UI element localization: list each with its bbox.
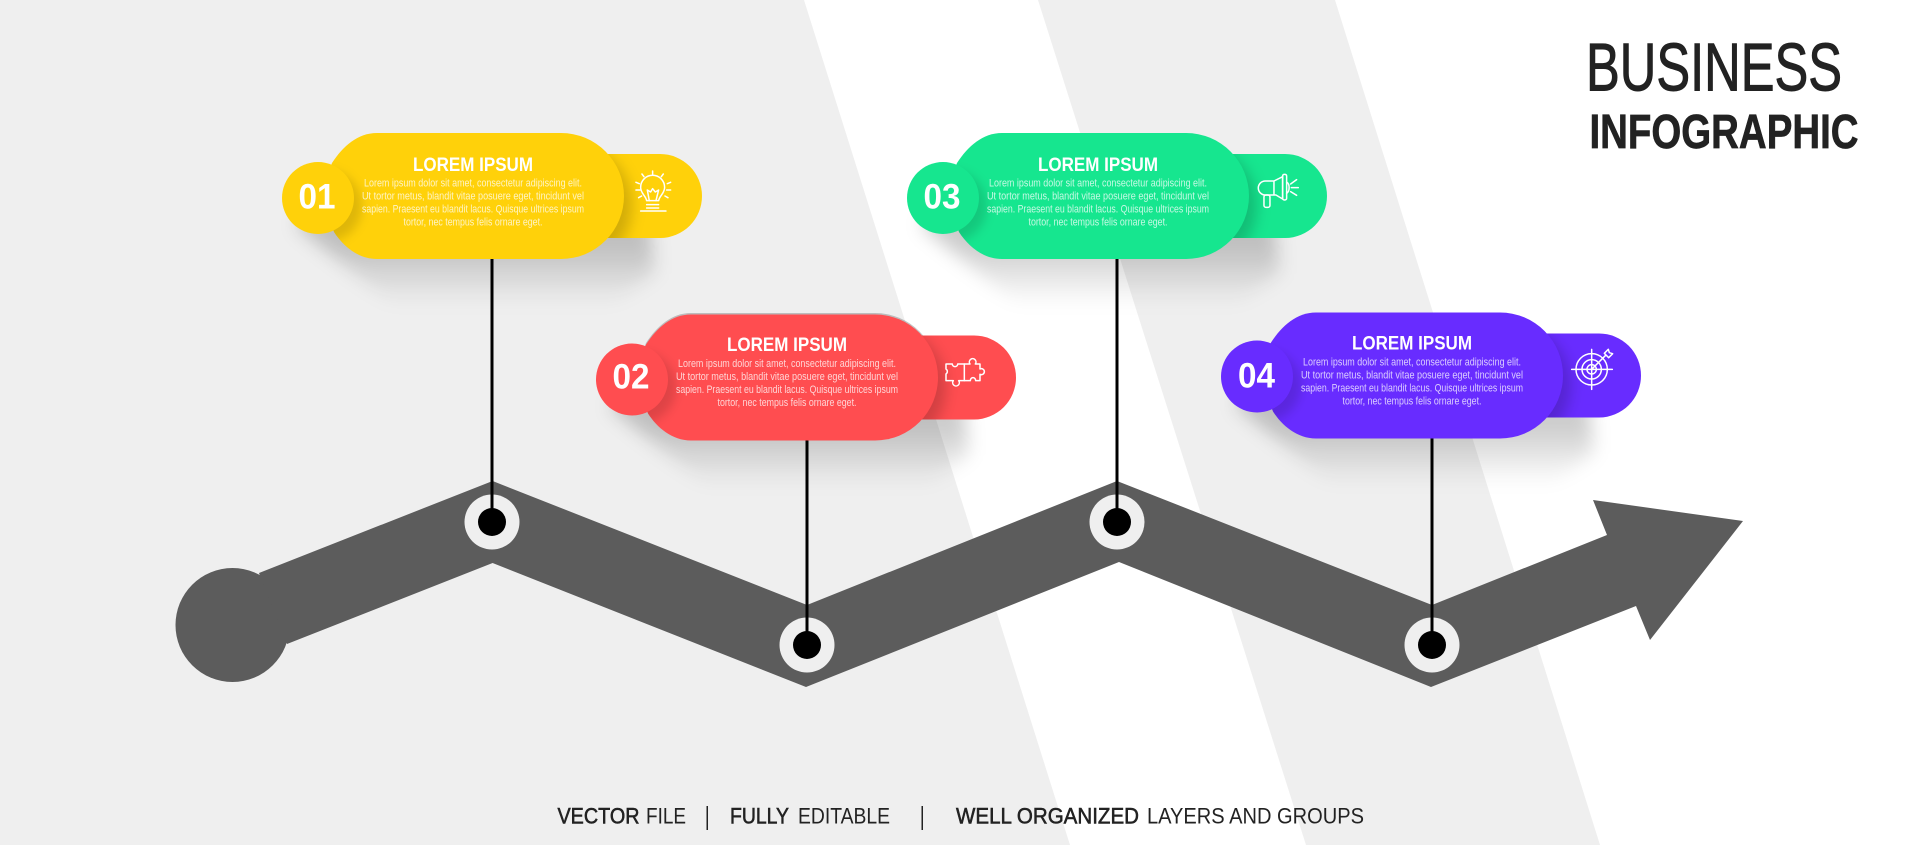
body text: sapien. Praesent eu blandit lacus. Quisque ultrices ipsum [676, 384, 898, 396]
heading: LOREM IPSUM [1038, 155, 1158, 176]
body text: tortor, nec tempus felis ornare eget. [404, 216, 542, 228]
body text [987, 178, 1209, 228]
title: INFOGRAPHIC [1590, 105, 1858, 159]
footer tagline: FILE [646, 804, 686, 828]
body text: Lorem ipsum dolor sit amet, consectetur adipiscing elit. [364, 178, 582, 190]
number 02: 02 [612, 358, 650, 396]
heading: LOREM IPSUM [413, 155, 533, 176]
body text: Ut tortor metus, blandit vitae posuere eget, tincidunt vel [1301, 370, 1523, 382]
body text [676, 358, 898, 409]
body text: Ut tortor metus, blandit vitae posuere eget, tincidunt vel [362, 190, 584, 202]
body text: sapien. Praesent eu blandit lacus. Quisque ultrices ipsum [362, 204, 584, 216]
card 01 yellow [282, 133, 702, 306]
footer tagline: VECTOR [558, 804, 640, 828]
body text: Ut tortor metus, blandit vitae posuere eget, tincidunt vel [676, 371, 898, 383]
timeline node 3 [1090, 255, 1144, 550]
body text: Lorem ipsum dolor sit amet, consectetur adipiscing elit. [1303, 356, 1521, 368]
icon: light bulb [636, 171, 671, 211]
body text: sapien. Praesent eu blandit lacus. Quisque ultrices ipsum [1301, 382, 1523, 394]
body text: Lorem ipsum dolor sit amet, consectetur adipiscing elit. [989, 178, 1207, 190]
zigzag timeline arrow [176, 481, 1743, 687]
body text: Lorem ipsum dolor sit amet, consectetur adipiscing elit. [678, 358, 896, 370]
card 04 purple [1221, 312, 1641, 486]
card 02 red [596, 313, 1016, 488]
timeline node 4 [1404, 435, 1460, 672]
card 03 green [907, 133, 1327, 306]
body text: sapien. Praesent eu blandit lacus. Quisque ultrices ipsum [987, 204, 1209, 216]
body text: tortor, nec tempus felis ornare eget. [1028, 216, 1168, 228]
body text [362, 178, 584, 228]
footer tagline: EDITABLE [798, 804, 890, 828]
body text: tortor, nec tempus felis ornare eget. [1342, 396, 1482, 408]
body text [1301, 356, 1523, 408]
timeline node 1 [464, 255, 520, 550]
number 04: 04 [1238, 356, 1276, 396]
title [1586, 30, 1858, 159]
title: BUSINESS [1586, 30, 1842, 106]
footer tagline: LAYERS AND GROUPS [1147, 804, 1364, 828]
icon: target with arrow [1572, 349, 1613, 389]
footer tagline: FULLY [730, 804, 789, 828]
number 01: 01 [298, 178, 336, 216]
heading: LOREM IPSUM [1352, 334, 1472, 354]
number 03: 03 [924, 178, 960, 216]
icon: megaphone [1258, 174, 1298, 207]
footer tagline: WELL ORGANIZED [956, 804, 1139, 828]
footer tagline [558, 804, 1364, 830]
timeline node 2 [780, 436, 834, 672]
body text: Ut tortor metus, blandit vitae posuere eget, tincidunt vel [987, 190, 1209, 202]
icon: puzzle pieces [946, 359, 984, 386]
body text: tortor, nec tempus felis ornare eget. [718, 397, 856, 409]
heading: LOREM IPSUM [727, 335, 847, 356]
